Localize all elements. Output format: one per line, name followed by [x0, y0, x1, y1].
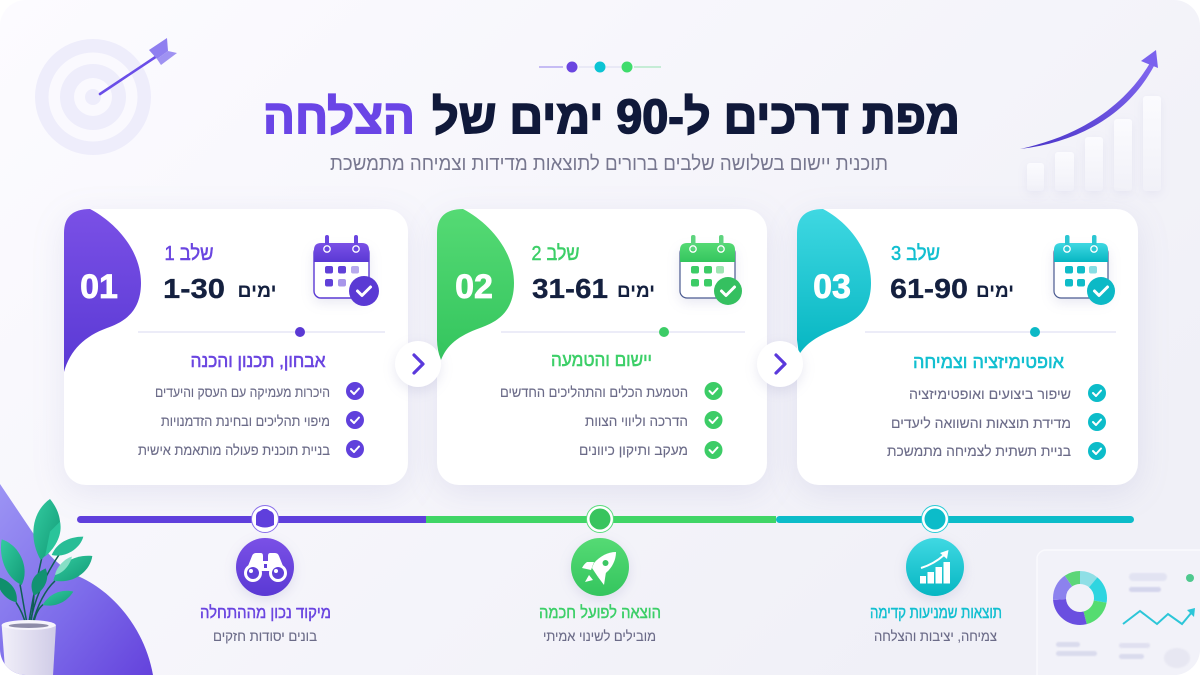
checklist: [887, 384, 1106, 460]
timeline node 2: [586, 506, 614, 532]
badge: 01: [64, 209, 141, 372]
icon: target with arrow: [35, 38, 177, 155]
day range: 1-30: [163, 273, 225, 304]
icon: calendar: [680, 235, 742, 305]
panel: step 2: [437, 209, 767, 485]
panel: step 1: [64, 209, 408, 485]
icon: binoculars: [236, 538, 294, 596]
outcome 2: launch: [539, 538, 661, 644]
day range: ימים: [238, 281, 276, 302]
outcome 3: results: [870, 538, 1002, 644]
illustration: dashboard panel: [1037, 550, 1200, 675]
badge: 02: [437, 209, 514, 360]
outcome heading: תוצאות שמניעות קדימה: [870, 604, 1002, 622]
outcome description: מובילים לשינוי אמיתי: [543, 628, 656, 644]
outcome heading: הוצאה לפועל חכמה: [539, 604, 661, 622]
outcome description: צמיחה, יציבות והצלחה: [874, 628, 997, 644]
checklist: שיפור ביצועים ואופטימיזציה: [909, 387, 1071, 403]
step heading: אופטימיזציה וצמיחה: [913, 351, 1064, 372]
checklist: מיפוי תהליכים ובחינת הזדמנויות: [161, 413, 330, 430]
checklist: בניית תוכנית פעולה מותאמת אישית: [138, 442, 330, 459]
checklist: הטמעת הכלים והתהליכים החדשים: [500, 384, 688, 401]
subtitle: תוכנית יישום בשלושה שלבים ברורים לתוצאות מדידות וצמיחה מתמשכת: [330, 153, 888, 175]
title: מפת דרכים ל-90 ימים של: [432, 91, 960, 144]
day range: [890, 273, 1014, 304]
decorative dots above title: [539, 62, 661, 72]
day range: ימים: [617, 281, 655, 302]
badge: 02: 02: [455, 268, 493, 306]
stage label: שלב 2: [532, 242, 580, 265]
checklist: מדידת תוצאות והשוואה ליעדים: [891, 415, 1071, 432]
outcome 1: focus: [200, 538, 331, 644]
timeline node 1: [252, 506, 278, 532]
day range: ימים: [976, 281, 1014, 302]
stage label: שלב 3: [891, 242, 940, 265]
checklist: בניית תשתית לצמיחה מתמשכת: [887, 443, 1071, 460]
day range: 61-90: [890, 273, 968, 304]
stage label: שלב 1: [164, 242, 214, 265]
step heading: אבחון, תכנון והכנה: [190, 350, 326, 371]
outcome description: בונים יסודות חזקים: [213, 628, 317, 644]
day range: [532, 273, 655, 304]
arrow: step 2 to step 3: [757, 341, 803, 387]
checklist: הדרכה וליווי הצוות: [585, 413, 688, 430]
icon: growth bars with arrow: [1020, 50, 1161, 191]
icon: rising chart: [906, 538, 964, 596]
timeline node 3: [922, 506, 948, 532]
day range: 31-61: [532, 273, 608, 304]
step heading: יישום והטמעה: [551, 349, 652, 370]
checklist: מעקב ותיקון כיוונים: [579, 443, 688, 459]
illustration: plant on purple shape: [0, 484, 153, 675]
badge: 03: [797, 209, 871, 355]
icon: calendar: [314, 235, 379, 306]
checklist: [500, 382, 722, 459]
arrow: step 1 to step 2: [395, 341, 441, 387]
timeline: [77, 506, 1134, 532]
checklist: [138, 382, 364, 459]
checklist: היכרות מעמיקה עם העסק והיעדים: [155, 385, 330, 401]
icon: rocket: [571, 538, 629, 596]
icon: calendar: [1054, 235, 1115, 305]
outcome heading: מיקוד נכון מההתחלה: [200, 604, 331, 622]
title: הצלחה: [263, 91, 415, 144]
day range: [163, 273, 276, 304]
badge: 03: 03: [813, 268, 851, 306]
line sparkline: [1123, 608, 1195, 624]
donut chart: [1060, 578, 1100, 618]
badge: 01: 01: [80, 268, 118, 306]
panel: step 3: [797, 209, 1138, 485]
